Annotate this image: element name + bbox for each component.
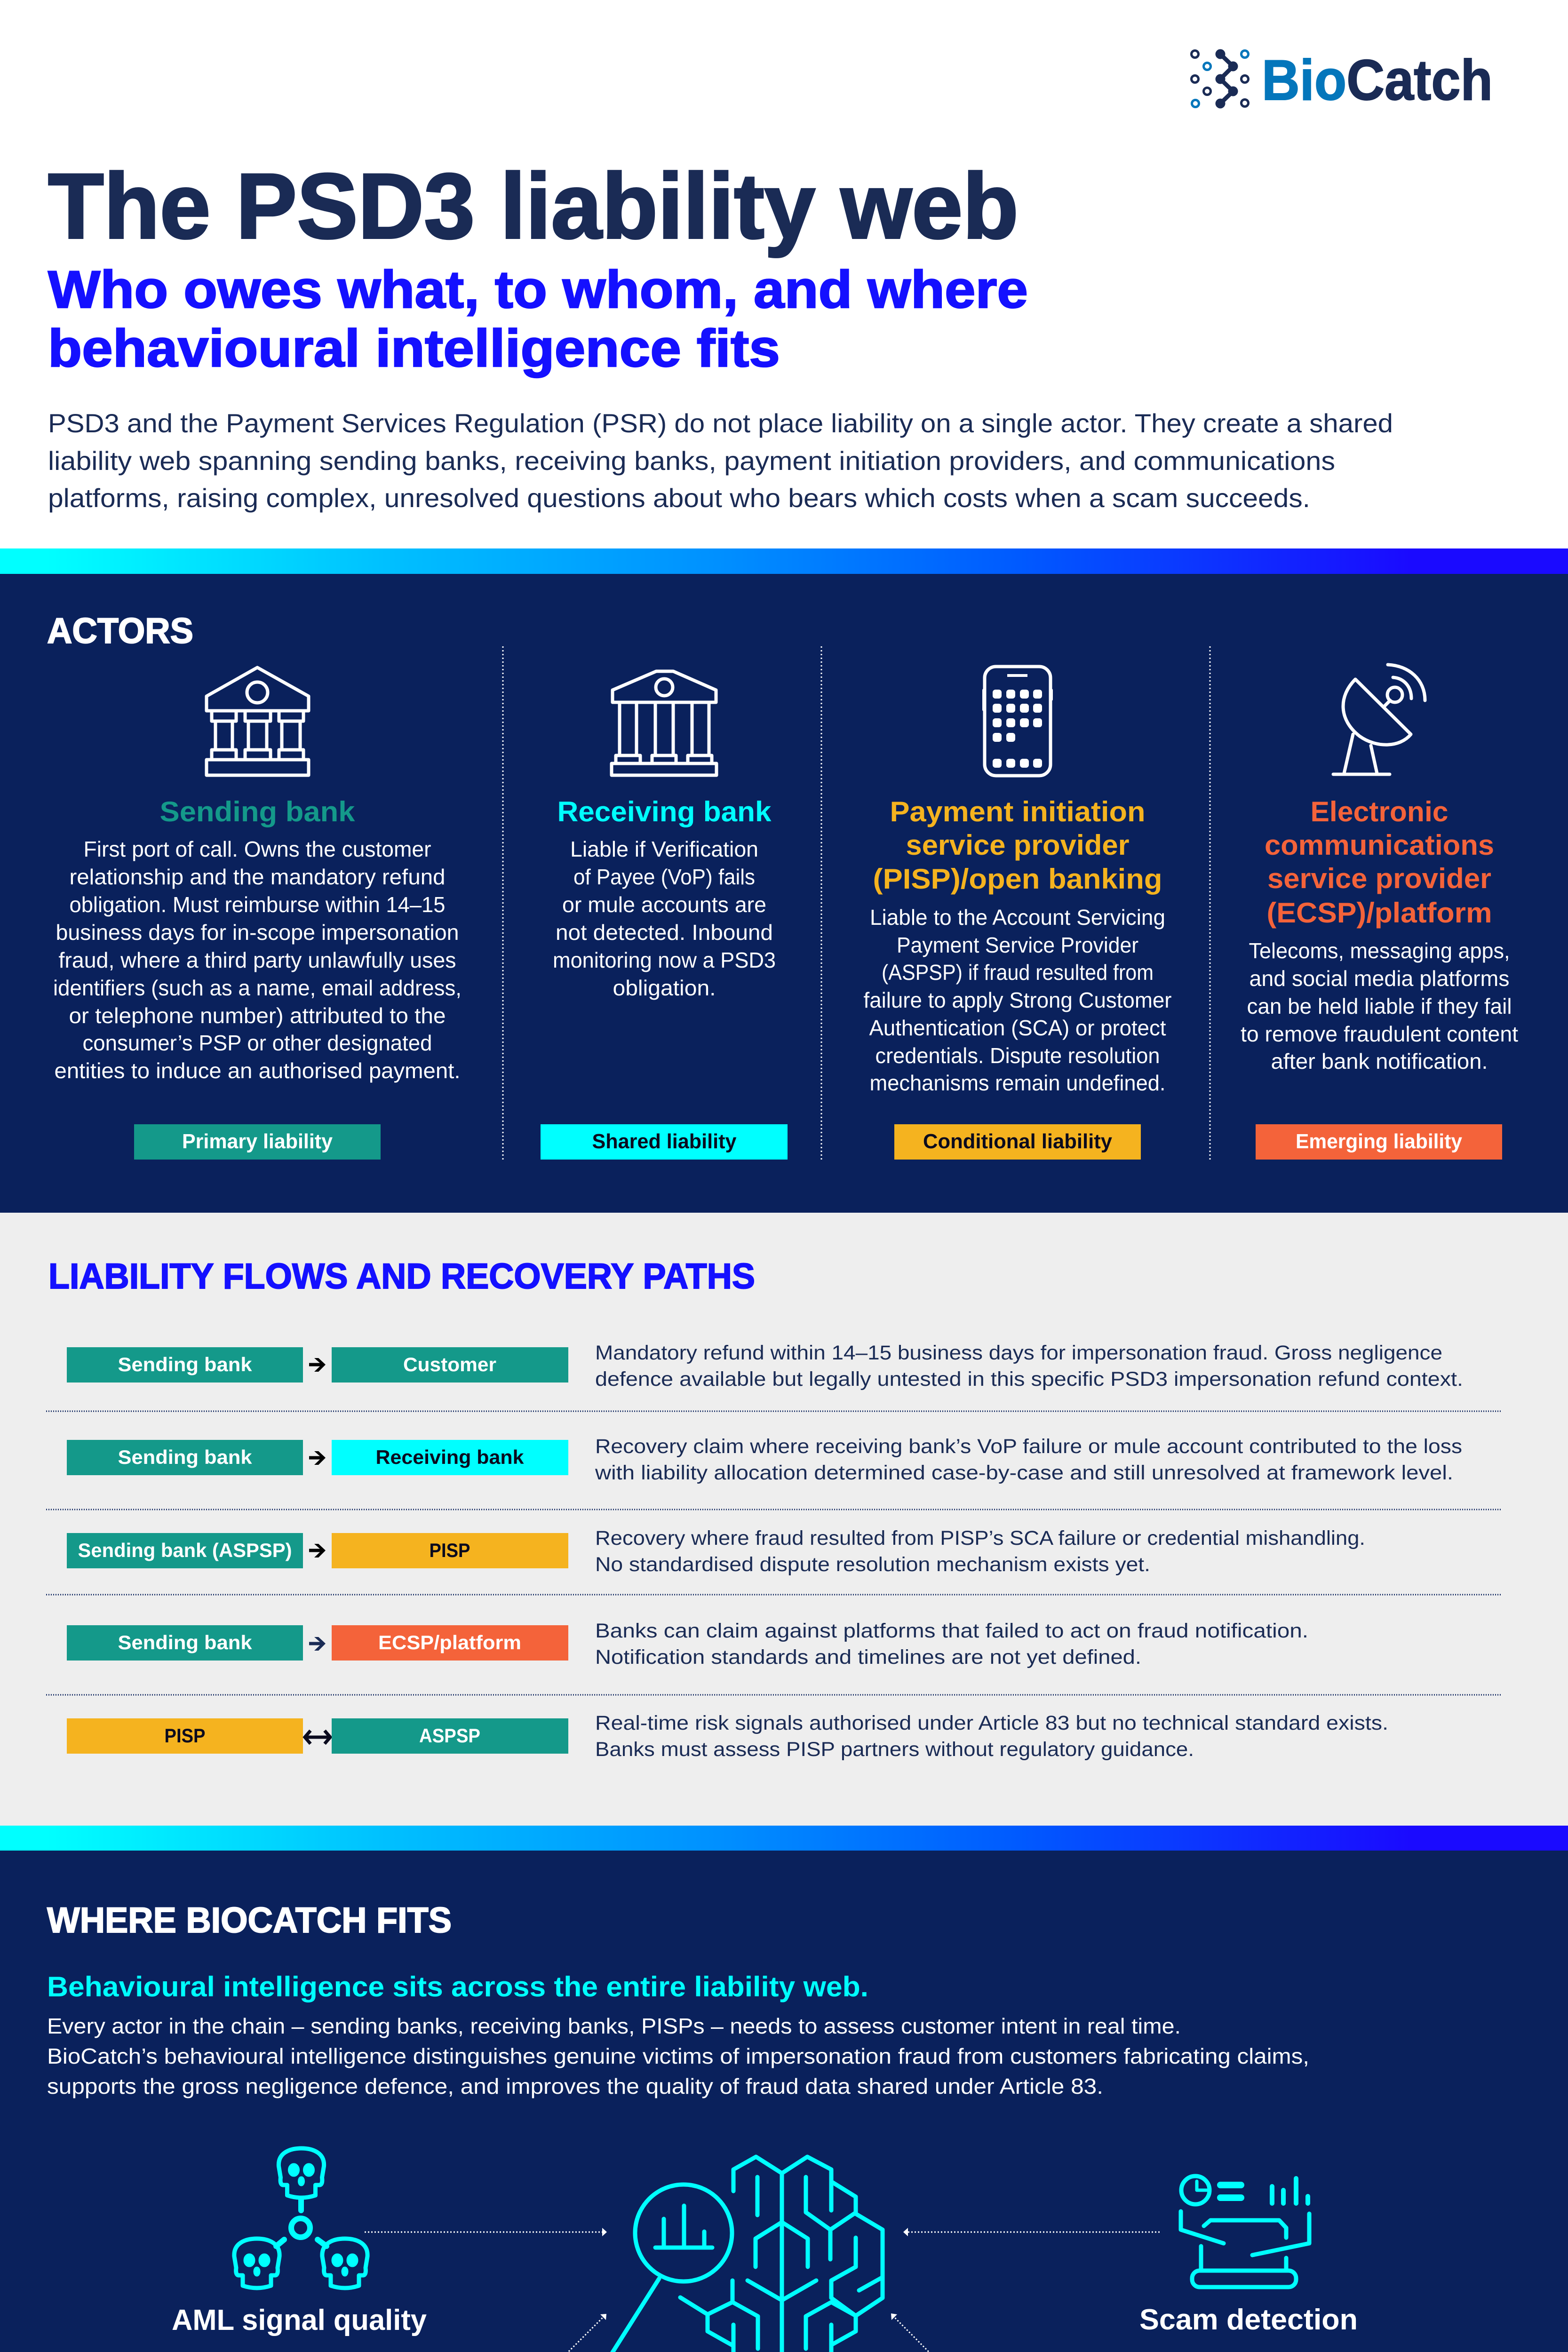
- badge: emerging liability: Emerging liability: [1296, 1130, 1462, 1153]
- badge: conditional liability: Conditional liability: [923, 1130, 1113, 1153]
- item: scam detection: [1139, 2176, 1358, 2336]
- flow row: PISP and ASPSP: PISP: [165, 1724, 205, 1747]
- flow row: sending bank ASPSP to PISP: PISP: [429, 1539, 470, 1561]
- intro text: liability web spanning sending banks, receiving banks, payment initiation providers, and communications: [48, 446, 1335, 476]
- heading: actors: ACTORS: [47, 611, 193, 651]
- heading: ECSP: communications: [1265, 829, 1494, 861]
- flow row: PISP and ASPSP: Banks must assess PISP partners without regulatory guidance.: [595, 1738, 1194, 1761]
- text: receiving bank description: not detected. Inbound: [556, 920, 773, 945]
- logo wordmark: BioCatch: [1262, 48, 1493, 112]
- text: sending bank description: fraud, where a third party unlawfully uses: [58, 948, 456, 972]
- flow row: sending bank to ECSP platform: [67, 1620, 1308, 1669]
- flow row: sending bank ASPSP to PISP: Recovery where fraud resulted from PISP’s SCA failure or credential mishandling.: [595, 1527, 1365, 1549]
- title: The PSD3 liability web: [48, 154, 1019, 258]
- subheading: behavioural intelligence: Behavioural intelligence sits across the entire liability web.: [47, 1971, 868, 2002]
- flow row: sending bank to receiving bank: with liability allocation determined case-by-case and still unresolved at framework level.: [595, 1462, 1453, 1484]
- icon: laptop with charts: [1181, 2176, 1309, 2287]
- heading: PISP: [873, 796, 1162, 895]
- flow row: sending bank to ECSP platform: Notification standards and timelines are not yet defined.: [595, 1646, 1141, 1669]
- text: ECSP description: can be held liable if they fail: [1247, 994, 1512, 1018]
- text: ECSP description: [1241, 938, 1518, 1073]
- text: sending bank description: or telephone number) attributed to the: [69, 1003, 446, 1028]
- text: sending bank description: entities to induce an authorised payment.: [55, 1058, 460, 1083]
- subtitle: behavioural intelligence fits: [48, 319, 780, 378]
- icon: satellite dish: [1333, 665, 1425, 774]
- flow row: sending bank to customer: Customer: [403, 1353, 496, 1375]
- flow row: sending bank to ECSP platform: Banks can claim against platforms that failed to act on fraud notification.: [595, 1620, 1308, 1642]
- text: receiving bank description: of Payee (VoP) fails: [573, 865, 755, 889]
- arrow: right: [309, 1544, 326, 1557]
- text: BioCatch description: Every actor in the chain – sending banks, receiving banks, PISPs – needs to assess customer intent in real time.: [47, 2014, 1181, 2038]
- badge: primary liability: Primary liability: [182, 1130, 333, 1153]
- heading: ECSP: (ECSP)/platform: [1266, 897, 1492, 929]
- flow row: sending bank ASPSP to PISP: [67, 1527, 1365, 1576]
- flow row: sending bank to customer: defence available but legally untested in this specific PSD3 impersonation refund context.: [595, 1368, 1463, 1391]
- badge: primary liability: [134, 1124, 381, 1160]
- flow row: sending bank to customer: Mandatory refund within 14–15 business days for impersonation fraud. Gross negligence: [595, 1342, 1442, 1364]
- intro text: PSD3 and the Payment Services Regulation (PSR) do not place liability on a single actor. They create a shared: [48, 408, 1393, 438]
- text: PISP description: [864, 905, 1171, 1095]
- text: PISP description: (ASPSP) if fraud resulted from: [882, 960, 1154, 985]
- icon: three skulls: [234, 2148, 367, 2288]
- text: BioCatch description: supports the gross negligence defence, and improves the quality of fraud data shared under Article 83.: [47, 2074, 1103, 2098]
- text: sending bank description: consumer’s PSP or other designated: [83, 1031, 432, 1055]
- flow row: sending bank to customer: Sending bank: [118, 1353, 252, 1375]
- heading: liability flows: LIABILITY FLOWS AND RECOVERY PATHS: [48, 1256, 755, 1296]
- arrow: gross negligence to centre: [891, 2313, 998, 2352]
- label: AML signal quality: AML signal quality: [172, 2304, 427, 2336]
- flow row: PISP and ASPSP: [67, 1712, 1388, 1761]
- panel: liability flows and recovery paths: [0, 1213, 1568, 1826]
- text: BioCatch description: BioCatch’s behavioural intelligence distinguishes genuine victims of impersonation fraud from customers fabricating claims,: [47, 2044, 1309, 2068]
- text: BioCatch description: [47, 2014, 1309, 2098]
- heading: receiving bank: Receiving bank: [557, 796, 772, 827]
- subtitle: Who owes what, to whom, and where: [48, 260, 1028, 319]
- actor: electronic communications service provider: [1241, 665, 1518, 1160]
- heading: PISP: service provider: [906, 829, 1129, 861]
- flow row: sending bank to receiving bank: [67, 1435, 1462, 1484]
- text: receiving bank description: [553, 837, 776, 1000]
- heading: where BioCatch fits: WHERE BIOCATCH FITS: [47, 1900, 452, 1940]
- text: PISP description: credentials. Dispute resolution: [875, 1043, 1160, 1068]
- flow row: PISP and ASPSP: ASPSP: [419, 1724, 480, 1747]
- icon: sending bank building: [207, 667, 309, 775]
- heading: PISP: (PISP)/open banking: [873, 863, 1162, 895]
- text: PISP description: mechanisms remain undefined.: [869, 1071, 1166, 1095]
- actor: sending bank: [53, 667, 462, 1160]
- icon: smartphone: [984, 667, 1051, 776]
- text: sending bank description: identifiers (such as a name, email address,: [53, 976, 462, 1000]
- heading: ECSP: service provider: [1267, 863, 1491, 894]
- arrow: impersonation to centre: [499, 2314, 606, 2352]
- intro text: platforms, raising complex, unresolved questions about who bears which costs when a scam succeeds.: [48, 483, 1310, 513]
- text: receiving bank description: or mule accounts are: [562, 892, 766, 917]
- text: ECSP description: after bank notification.: [1271, 1049, 1488, 1073]
- badge: emerging liability: [1256, 1124, 1502, 1160]
- text: sending bank description: obligation. Must reimburse within 14–15: [70, 892, 445, 917]
- icon: brain with magnifier: [611, 2157, 883, 2352]
- icon: logo network mark: [1191, 49, 1249, 108]
- panel: actors: [0, 574, 1568, 1213]
- subtitle: [48, 260, 1028, 378]
- flow row: sending bank to receiving bank: Receiving bank: [375, 1446, 524, 1468]
- flow row: sending bank to customer: [67, 1342, 1463, 1391]
- heading: ECSP: Electronic: [1311, 796, 1448, 827]
- text: ECSP description: Telecoms, messaging apps,: [1249, 938, 1510, 963]
- badge: shared liability: Shared liability: [592, 1130, 737, 1153]
- arrow: right: [309, 1358, 326, 1372]
- arrow: scam detection to centre: [903, 2228, 1160, 2236]
- arrow: two-way: [305, 1731, 330, 1744]
- text: PISP description: failure to apply Strong Customer: [864, 988, 1171, 1012]
- item: AML signal quality: [172, 2148, 427, 2336]
- intro text: [48, 408, 1393, 513]
- text: receiving bank description: monitoring now a PSD3: [553, 948, 776, 972]
- arrow: right: [309, 1451, 326, 1465]
- icon: receiving bank building: [612, 671, 716, 775]
- text: sending bank description: relationship and the mandatory refund: [70, 865, 445, 889]
- text: PISP description: Liable to the Account Servicing: [870, 905, 1165, 930]
- text: receiving bank description: Liable if Verification: [570, 837, 758, 861]
- text: ECSP description: to remove fraudulent content: [1241, 1022, 1518, 1046]
- text: sending bank description: [53, 837, 462, 1083]
- text: PISP description: Authentication (SCA) or protect: [869, 1016, 1166, 1040]
- heading: ECSP: [1265, 796, 1494, 929]
- heading: PISP: Payment initiation: [890, 796, 1145, 827]
- panel: where BioCatch fits: [0, 1851, 1568, 2352]
- label: scam detection: Scam detection: [1139, 2304, 1358, 2336]
- badge: conditional liability: [894, 1124, 1141, 1160]
- heading: sending bank: Sending bank: [160, 796, 355, 827]
- arrow: AML to centre: [365, 2228, 607, 2236]
- actor: payment initiation service provider: [864, 667, 1171, 1160]
- logo: BioCatch: [1191, 48, 1493, 112]
- actor: receiving bank: [541, 671, 788, 1160]
- flow row: sending bank to ECSP platform: ECSP/platform: [378, 1631, 521, 1653]
- text: sending bank description: business days for in-scope impersonation: [56, 920, 459, 945]
- flow row: sending bank to ECSP platform: Sending bank: [118, 1631, 252, 1653]
- text: sending bank description: First port of call. Owns the customer: [84, 837, 431, 861]
- text: PISP description: Payment Service Provider: [897, 933, 1138, 957]
- flow row: sending bank to receiving bank: Recovery claim where receiving bank’s VoP failure or mule account contributed to the loss: [595, 1435, 1462, 1458]
- badge: shared liability: [541, 1124, 788, 1160]
- flow row: sending bank ASPSP to PISP: No standardised dispute resolution mechanism exists yet.: [595, 1553, 1150, 1576]
- flow row: sending bank ASPSP to PISP: Sending bank (ASPSP): [78, 1539, 292, 1561]
- text: ECSP description: and social media platforms: [1250, 966, 1509, 991]
- arrow: right: [309, 1637, 326, 1651]
- text: receiving bank description: obligation.: [613, 976, 716, 1000]
- flow row: PISP and ASPSP: Real-time risk signals authorised under Article 83 but no technical standard exists.: [595, 1712, 1388, 1734]
- flow row: sending bank to receiving bank: Sending bank: [118, 1446, 252, 1468]
